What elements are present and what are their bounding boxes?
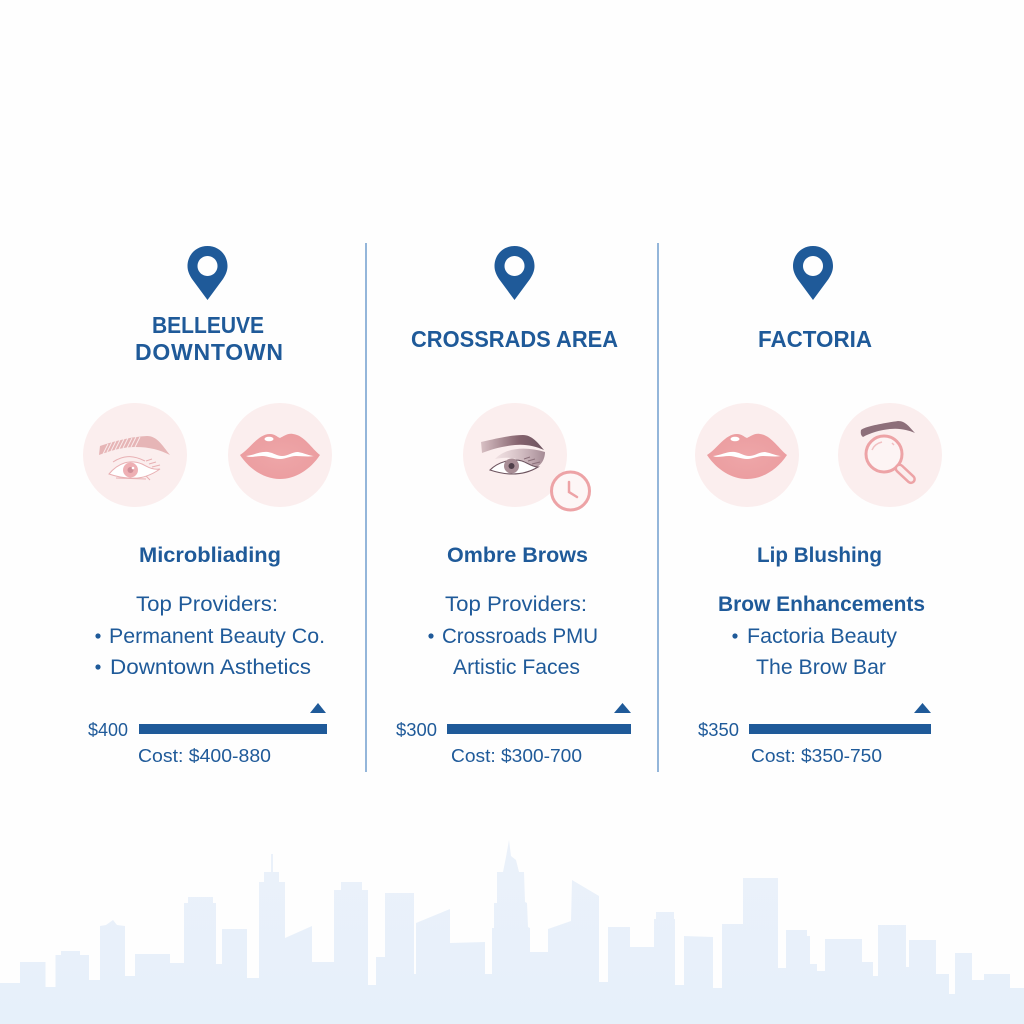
icon: location pin xyxy=(793,246,833,300)
service name: Ombre Brows xyxy=(447,544,588,567)
cost range bar xyxy=(396,703,631,766)
skyline xyxy=(0,840,1024,1024)
provider list: Brow Enhancements xyxy=(718,593,925,616)
cost range bar: $300 xyxy=(396,719,437,740)
panel: Crossroads Area xyxy=(396,246,631,766)
cost range bar: Cost: $300-700 xyxy=(451,745,582,766)
cost range bar: Cost: $350-750 xyxy=(751,745,882,766)
heading: Bellevue Downtown xyxy=(135,312,283,365)
panel: Factoria xyxy=(695,246,942,766)
heading: Bellevue Downtown: DOWNTOWN xyxy=(135,339,283,365)
provider list: Factoria Beauty xyxy=(747,625,898,648)
panel: Bellevue Downtown xyxy=(83,246,332,766)
cost range bar: Cost: $400-880 xyxy=(138,745,271,766)
icon: brow and eye xyxy=(83,403,187,507)
heading: Crossroads Area: CROSSRADS AREA xyxy=(411,326,618,352)
cost range bar: $400 xyxy=(88,719,128,740)
cost range bar xyxy=(88,703,327,766)
provider list xyxy=(718,593,925,679)
cost range bar xyxy=(698,703,931,766)
heading: Factoria: FACTORIA xyxy=(758,326,872,352)
icon: location pin xyxy=(494,246,534,300)
provider list: Artistic Faces xyxy=(453,656,580,679)
provider list xyxy=(95,593,325,679)
service name: Microbliading xyxy=(139,544,281,567)
provider list: The Brow Bar xyxy=(756,656,886,679)
provider list: Top Providers: xyxy=(136,593,278,616)
heading: Bellevue Downtown: BELLEUVE xyxy=(152,312,264,338)
icon: lips xyxy=(228,403,332,507)
service name: Lip Blushing xyxy=(757,544,882,567)
provider list: Top Providers: xyxy=(445,593,587,616)
icon: brow and magnifier xyxy=(838,403,942,507)
icon: lips xyxy=(695,403,799,507)
provider list xyxy=(428,593,598,679)
provider list: Crossroads PMU xyxy=(442,625,598,648)
provider list: Downtown Asthetics xyxy=(110,656,311,679)
provider list: Permanent Beauty Co. xyxy=(109,625,325,648)
icon: shaded brow, eye and clock xyxy=(463,403,590,510)
icon: location pin xyxy=(188,246,228,300)
cost range bar: $350 xyxy=(698,719,739,740)
